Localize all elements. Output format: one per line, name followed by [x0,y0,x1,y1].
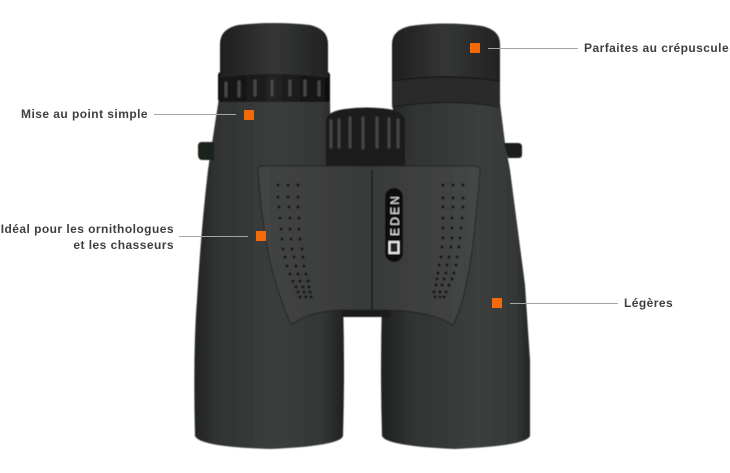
lower hinge [342,304,391,317]
right side tab [504,143,522,158]
bridge centre seam [371,170,373,310]
right collar [392,66,500,106]
callout: Idéal pour les ornithologues et les chasseurs: et les chasseurs [73,238,174,252]
left barrel body [194,98,344,449]
left focus ring [218,72,330,102]
left eyecup [220,23,328,78]
callout: Parfaites au crépuscule: Parfaites au crépuscule [584,41,729,55]
central focus wheel [326,108,405,172]
eyecup seam [392,77,500,81]
right barrel body [381,95,530,449]
central bridge [258,166,480,325]
left barrel [194,23,344,449]
left side tab [198,142,214,160]
callout: Idéal pour les ornithologues et les chasseurs: Idéal pour les ornithologues [1,222,174,236]
callout: Mise au point simple: Mise au point simple [21,107,148,121]
binoculars photo [194,23,530,449]
left grip dots [278,185,311,297]
right barrel [381,24,530,449]
callout: Légères [492,296,673,310]
callout: Idéal pour les ornithologues et les chasseurs [1,222,266,252]
right grip dots [434,185,463,297]
right eyecup [392,24,500,80]
EDEN badge: EDEN [388,194,402,236]
callout: Mise au point simple [21,107,254,121]
callout: Parfaites au crépuscule [470,41,729,55]
EDEN badge [385,188,403,262]
callout: Légères: Légères [624,296,673,310]
